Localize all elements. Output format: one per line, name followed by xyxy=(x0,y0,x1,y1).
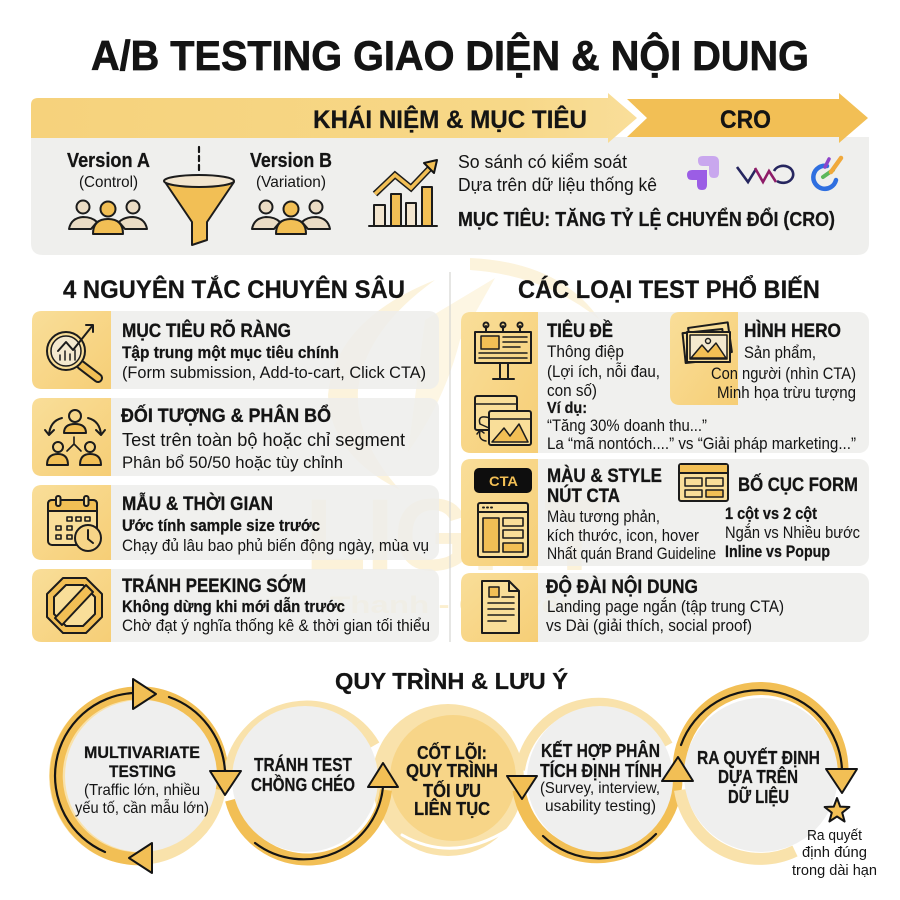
text block: Ước tính sample size trước xyxy=(122,516,320,535)
card: tránh peeking sớm xyxy=(32,569,439,642)
text: bố cục form xyxy=(725,474,860,561)
icon: stop sign xyxy=(47,578,102,633)
text block: ĐỐI TƯỢNG & PHÂN BỔ xyxy=(121,405,331,427)
card: màu nút CTA và bố cục form xyxy=(461,459,869,566)
text: tiêu đề: con số) xyxy=(547,381,597,400)
watermark logo and wordmark: LIGHT xyxy=(305,478,605,592)
text: hình hero: Sản phẩm, xyxy=(744,343,816,362)
text block: TRÁNH PEEKING SỚM xyxy=(122,575,306,597)
text: multivariate testing: (Traffic lớn, nhiều xyxy=(84,782,200,799)
text block xyxy=(122,320,426,382)
icon: page layout xyxy=(478,503,528,557)
text: tiêu đề: Ví dụ: xyxy=(547,400,587,417)
text: cốt lõi xyxy=(406,742,498,819)
text block: Chờ đạt ý nghĩa thống kê & thời gian tối thiểu xyxy=(122,616,430,635)
step: ra quyết định xyxy=(679,688,842,859)
icon: audience split xyxy=(45,410,105,465)
text block: vs Dài (giải thích, social proof) xyxy=(546,616,752,635)
icon: funnel xyxy=(164,147,234,245)
text: tiêu đề: Thông điệp xyxy=(547,342,624,361)
text: tiêu đề xyxy=(547,320,856,453)
text: ra quyết định: RA QUYẾT ĐỊNH xyxy=(697,747,820,768)
text: mục tiêu CRO: MỤC TIÊU: TĂNG TỶ LỆ CHUYỂN ĐỔI (CRO) xyxy=(458,207,835,231)
text: màu và style nút CTA xyxy=(547,465,716,563)
text: tránh test chồng chéo xyxy=(251,754,355,795)
icon: users version A xyxy=(69,200,147,234)
text: multivariate testing: TESTING xyxy=(109,762,176,781)
text: bố cục form: Inline vs Popup xyxy=(725,542,830,561)
heading: các loại test: CÁC LOẠI TEST PHỔ BIẾN xyxy=(518,274,820,304)
icon: users version B xyxy=(252,200,330,234)
text block xyxy=(122,493,429,555)
version A label xyxy=(67,150,150,191)
text block xyxy=(546,576,784,635)
text: kết hợp phân tích định tính: TÍCH ĐỊNH TÍNH xyxy=(540,760,662,781)
text: hình hero: Con người (nhìn CTA) xyxy=(711,364,856,383)
text: màu và style nút CTA: Nhất quán Brand Guideline xyxy=(547,544,716,563)
text block: Phân bổ 50/50 hoặc tùy chỉnh xyxy=(122,453,343,472)
logo: colored ring xyxy=(813,158,841,189)
version A label: Version A xyxy=(67,150,150,172)
version A label: (Control) xyxy=(79,174,138,191)
step: multivariate testing xyxy=(49,687,227,865)
step: kết hợp phân tích định tính xyxy=(519,703,676,857)
icon: growth chart xyxy=(369,160,437,226)
version B label: (Variation) xyxy=(256,174,326,191)
card: đối tượng và phân bổ xyxy=(32,398,439,476)
text block: Tập trung một mục tiêu chính xyxy=(122,343,339,362)
ribbon: CRO xyxy=(627,93,868,143)
step: cốt lõi xyxy=(372,704,524,856)
text: tiêu đề: “Tăng 30% doanh thu...” xyxy=(547,416,707,435)
ribbon: CRO: CRO xyxy=(720,106,771,134)
text: bố cục form: Ngắn vs Nhiều bước xyxy=(725,523,860,542)
text: màu và style nút CTA: kích thước, icon, hover xyxy=(547,526,699,545)
text: so sánh: Dựa trên dữ liệu thống kê xyxy=(458,174,657,195)
card: tiêu đề và hình hero xyxy=(461,312,869,453)
text block xyxy=(121,405,405,472)
text: ra quyết định: DỰA TRÊN xyxy=(718,766,798,787)
logo: purple tool xyxy=(687,156,719,190)
text: tiêu đề: La “mã nontóch....” vs “Giải pháp marketing...” xyxy=(547,434,856,453)
icon: CTA button: CTA xyxy=(489,473,518,489)
icon: browser windows xyxy=(475,396,531,445)
text block: Chạy đủ lâu bao phủ biến động ngày, mùa vụ xyxy=(122,536,429,555)
text: hình hero: HÌNH HERO xyxy=(744,320,841,342)
text: kết hợp phân tích định tính: (Survey, interview, xyxy=(540,780,660,797)
icon: calendar clock xyxy=(48,496,101,551)
icon: magnifier chart xyxy=(47,325,98,378)
text: hình hero xyxy=(711,320,856,402)
icon: billboard xyxy=(475,322,531,379)
text block: MỤC TIÊU RÕ RÀNG xyxy=(122,320,291,342)
text: tránh test chồng chéo: TRÁNH TEST xyxy=(254,754,352,775)
text: quyết định đúng dài hạn: định đúng xyxy=(802,844,867,861)
heading: 4 nguyên tắc: 4 NGUYÊN TẮC CHUYÊN SÂU xyxy=(63,274,405,304)
card: mục tiêu rõ ràng xyxy=(32,311,439,389)
text block xyxy=(122,575,430,635)
text block: ĐỘ ĐÀI NỘI DUNG xyxy=(546,576,698,598)
text: bố cục form: 1 cột vs 2 cột xyxy=(725,504,817,523)
icon: hero images xyxy=(683,322,732,363)
text: multivariate testing: MULTIVARIATE xyxy=(84,743,200,762)
panel: khái niệm và mục tiêu xyxy=(31,93,869,255)
text block: Không dừng khi mới dẫn trước xyxy=(122,597,345,616)
text: tiêu đề: (Lợi ích, nỗi đau, xyxy=(547,362,660,381)
text: màu và style nút CTA: Màu tương phản, xyxy=(547,507,660,526)
text: quyết định đúng dài hạn xyxy=(792,827,877,879)
watermark logo and wordmark xyxy=(305,258,605,619)
text: ra quyết định xyxy=(697,747,820,807)
text: so sánh xyxy=(458,151,657,195)
text: tránh test chồng chéo: CHỒNG CHÉO xyxy=(251,774,355,795)
text: ra quyết định: DỮ LIỆU xyxy=(728,786,789,807)
text: cốt lõi: CỐT LÕI: xyxy=(417,742,487,763)
heading: quy trình và lưu ý: QUY TRÌNH & LƯU Ý xyxy=(335,667,568,694)
text: hình hero: Minh họa trừu tượng xyxy=(717,383,856,402)
text: màu và style nút CTA: MÀU & STYLE xyxy=(547,465,662,487)
text: bố cục form: BỐ CỤC FORM xyxy=(738,474,858,496)
cycle arrows xyxy=(55,679,857,873)
step: tránh test chồng chéo xyxy=(229,706,386,860)
card: độ dài nội dung xyxy=(461,573,869,642)
icon: CTA button xyxy=(474,468,532,493)
ribbon: khái niệm xyxy=(31,93,637,143)
text: kết hợp phân tích định tính xyxy=(540,740,662,815)
version B label xyxy=(250,150,332,191)
title: A/B TESTING GIAO DIỆN & NỘI DUNG xyxy=(91,31,809,79)
watermark logo and wordmark: Thanh - Chuyên xyxy=(330,592,580,619)
text: màu và style nút CTA: NÚT CTA xyxy=(547,485,620,507)
text: quyết định đúng dài hạn: trong dài hạn xyxy=(792,862,877,879)
icon: document xyxy=(482,581,519,633)
text: kết hợp phân tích định tính: usability testing) xyxy=(545,798,656,815)
version B label: Version B xyxy=(250,150,332,172)
text: so sánh: So sánh có kiểm soát xyxy=(458,151,627,172)
text block: (Form submission, Add-to-cart, Click CTA) xyxy=(122,363,426,382)
text block: Landing page ngắn (tập trung CTA) xyxy=(547,597,784,616)
ribbon: khái niệm: KHÁI NIỆM & MỤC TIÊU xyxy=(313,104,587,134)
text: quyết định đúng dài hạn: Ra quyết xyxy=(807,827,863,844)
text: kết hợp phân tích định tính: KẾT HỢP PHÂN xyxy=(541,740,660,761)
logo: VWO xyxy=(737,166,793,183)
text: multivariate testing: yếu tố, cần mẫu lớn) xyxy=(75,798,209,817)
text: cốt lõi: LIÊN TỤC xyxy=(414,798,490,819)
text: multivariate testing xyxy=(75,743,209,817)
text block: MẪU & THỜI GIAN xyxy=(122,493,273,515)
text: cốt lõi: QUY TRÌNH xyxy=(406,760,498,781)
text: cốt lõi: TỐI ƯU xyxy=(423,780,481,801)
icon: form layout xyxy=(679,464,728,501)
text block: Test trên toàn bộ hoặc chỉ segment xyxy=(122,429,405,450)
card: mẫu và thời gian xyxy=(32,485,439,560)
text: tiêu đề: TIÊU ĐỀ xyxy=(547,320,613,342)
icon: star xyxy=(825,798,849,822)
